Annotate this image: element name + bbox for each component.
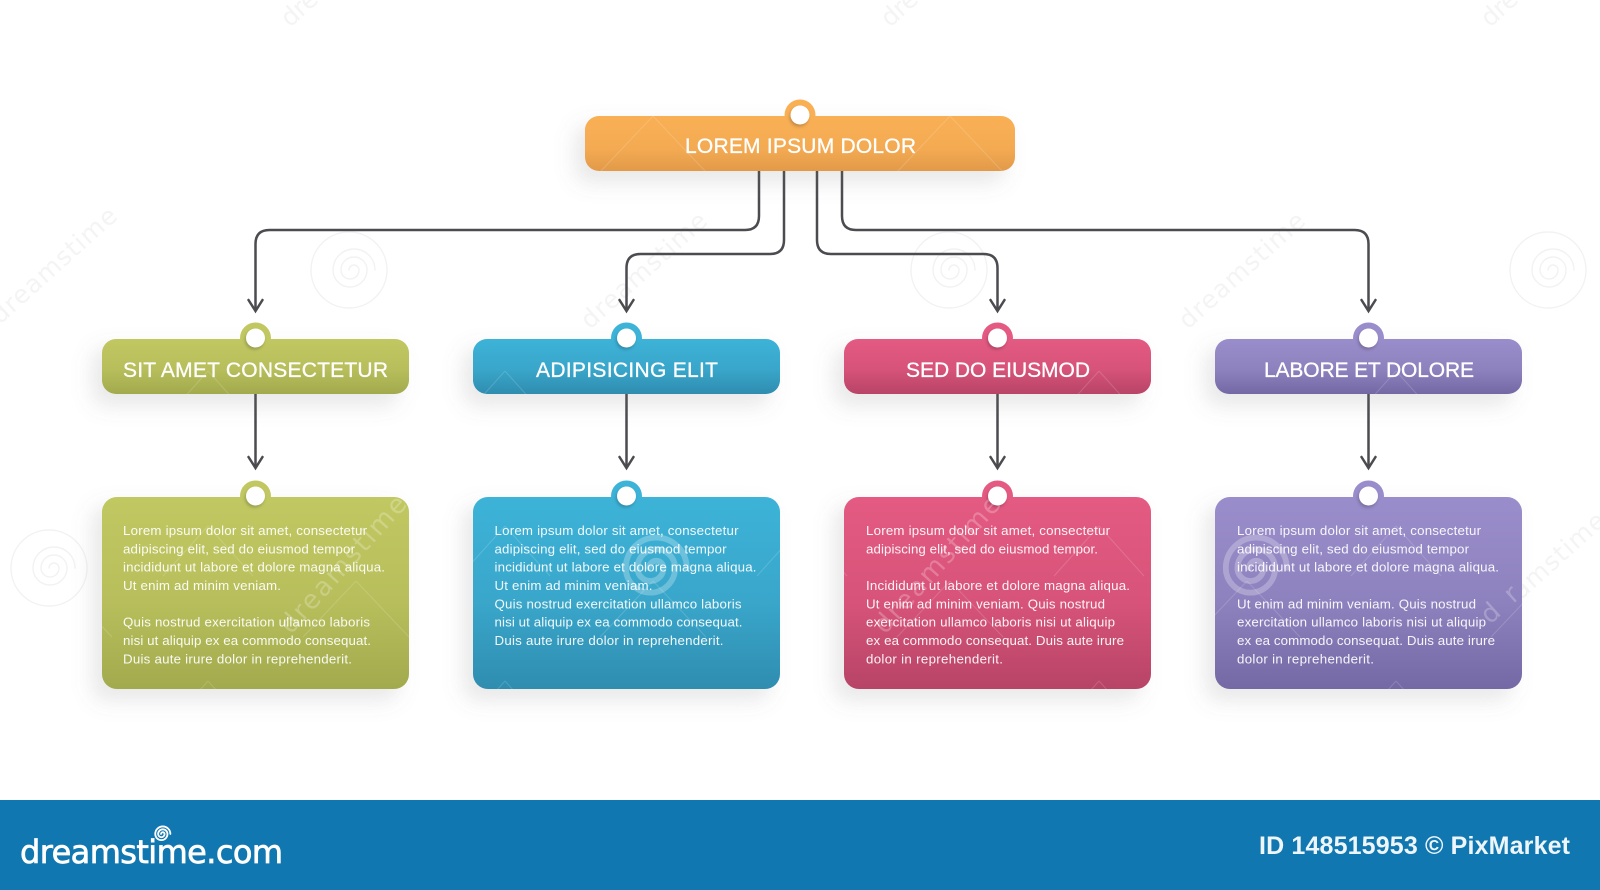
column 2 header box (463, 322, 780, 406)
body text: column 1: incididunt ut labore et dolore magna aliqua. (123, 560, 385, 575)
body text: column 4: ex ea commodo consequat. Duis aute irure (1237, 633, 1495, 648)
body text: column 3: Incididunt ut labore et dolore magna aliqua. (866, 578, 1130, 593)
connector: top box to column 4 (842, 171, 1376, 311)
body text: column 2: Ut enim ad minim veniam. (494, 578, 652, 593)
body text: column 1 (123, 523, 385, 666)
body text: column 3: adipiscing elit, sed do eiusmod tempor. (866, 541, 1098, 556)
heading: column 4: LABORE ET DOLORE (1264, 359, 1474, 382)
body text: column 1: Duis aute irure dolor in reprehenderit. (123, 651, 352, 666)
column 3 text panel (834, 480, 1151, 701)
body text: column 1: adipiscing elit, sed do eiusmod tempor (123, 541, 356, 556)
column 1 text panel (92, 480, 413, 701)
body text: column 4: Ut enim ad minim veniam. Quis nostrud (1237, 596, 1476, 611)
body text: column 2: incididunt ut labore et dolore magna aliqua. (494, 560, 756, 575)
heading: column 2: ADIPISICING ELIT (536, 359, 718, 382)
body text: column 2: adipiscing elit, sed do eiusmod tempor (494, 541, 727, 556)
body text: column 4 (1237, 523, 1499, 666)
body text: column 2 (494, 523, 756, 648)
arrow: column 4 header to text (1362, 394, 1376, 468)
body text: column 1: Lorem ipsum dolor sit amet, consectetur (123, 523, 368, 538)
watermark layer (0, 0, 1600, 634)
body text: column 3: exercitation ullamco laboris nisi ut aliquip (866, 615, 1115, 630)
column 3 header box (834, 322, 1151, 406)
column 1 text panel: dreamstime (274, 490, 413, 640)
heading: column 3: SED DO EIUSMOD (906, 359, 1090, 382)
body text: column 4: exercitation ullamco laboris nisi ut aliquip (1237, 615, 1486, 630)
body text: column 2: Lorem ipsum dolor sit amet, consectetur (494, 523, 739, 538)
body text: column 1: Quis nostrud exercitation ullamco laboris (123, 615, 370, 630)
watermark layer: dreamstime (575, 206, 713, 334)
heading: top box: LOREM IPSUM DOLOR (685, 135, 916, 158)
arrow: column 2 header to text (620, 394, 634, 468)
body text: column 4: incididunt ut labore et dolore magna aliqua. (1237, 560, 1499, 575)
column 2 text panel (463, 480, 780, 701)
column 3 text panel: dreamstime (868, 490, 1007, 640)
body text: column 1: Ut enim ad minim veniam. (123, 578, 281, 593)
body text: column 4: Lorem ipsum dolor sit amet, consectetur (1237, 523, 1482, 538)
connector: top box to column 2 (620, 171, 784, 311)
column 4 text panel (1205, 480, 1526, 701)
column 1 header box (92, 322, 409, 406)
body text: column 4: adipiscing elit, sed do eiusmod tempor (1237, 541, 1470, 556)
top box: Lorem ipsum dolor (575, 100, 1015, 183)
body text: column 3: Lorem ipsum dolor sit amet, consectetur (866, 523, 1111, 538)
body text: column 4: dolor in reprehenderit. (1237, 651, 1374, 666)
column 4 header box (1205, 322, 1522, 406)
logo: dreamstime.com: dreamstime.com (20, 833, 283, 871)
body text: column 2: nisi ut aliquip ex ea commodo consequat. (494, 615, 742, 630)
body text: column 3: ex ea commodo consequat. Duis aute irure (866, 633, 1124, 648)
arrow: column 3 header to text (990, 394, 1004, 468)
body text: column 3: Ut enim ad minim veniam. Quis nostrud (866, 596, 1105, 611)
footer bar (0, 800, 1600, 890)
body text: column 3 (866, 523, 1130, 666)
connector: top box to column 1 (248, 171, 759, 311)
column 4 text panel: dr (1475, 580, 1526, 630)
watermark layer: dreamstime (1173, 206, 1311, 334)
body text: column 2: Duis aute irure dolor in reprehenderit. (494, 633, 724, 648)
connector: top box to column 3 (817, 171, 1004, 311)
credit: image id and author: ID 148515953 © PixMarket (1259, 832, 1571, 860)
body text: column 2: Quis nostrud exercitation ullamco laboris (494, 596, 742, 611)
arrow: column 1 header to text (248, 394, 262, 468)
body text: column 3: dolor in reprehenderit. (866, 651, 1003, 666)
body text: column 1: nisi ut aliquip ex ea commodo consequat. (123, 633, 371, 648)
heading: column 1: SIT AMET CONSECTETUR (123, 359, 388, 382)
